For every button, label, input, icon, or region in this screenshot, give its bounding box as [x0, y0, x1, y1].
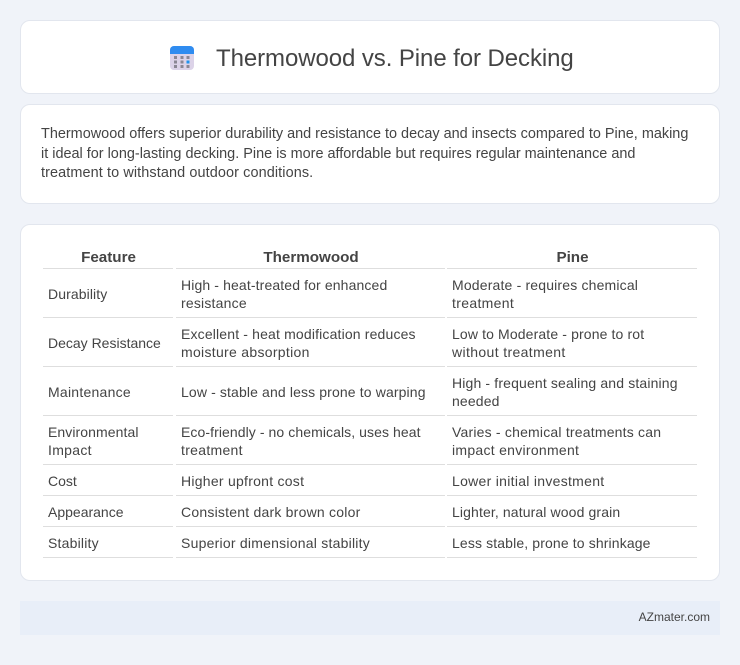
Stability Thermowood: Superior dimensional stability	[181, 535, 370, 551]
Environmental Thermowood	[181, 424, 421, 458]
row: Stability: Stability	[48, 535, 99, 551]
Durability Pine	[452, 277, 638, 311]
intro panel	[20, 104, 720, 204]
Environmental Thermowood: Eco-friendly - no chemicals, uses heat	[181, 424, 421, 440]
row: Cost: Cost	[48, 473, 77, 489]
row: Environmental Impact: Environmental	[48, 424, 139, 440]
panel: comparison table	[20, 224, 720, 581]
Durability Thermowood	[181, 277, 387, 311]
Stability Pine: Less stable, prone to shrinkage	[452, 535, 651, 551]
Durability Pine: Moderate - requires chemical	[452, 277, 638, 293]
row: Maintenance: Maintenance	[48, 384, 131, 400]
Decay Pine	[452, 326, 644, 360]
Maintenance Pine	[452, 375, 678, 409]
Environmental Pine: impact environment	[452, 442, 579, 458]
Durability Thermowood: resistance	[181, 295, 247, 311]
intro text: treatment to withstand outdoor conditions.	[41, 165, 313, 181]
icon: calendar	[170, 46, 194, 70]
Environmental Pine	[452, 424, 661, 458]
Decay Thermowood	[181, 326, 416, 360]
Cost Pine: Lower initial investment	[452, 473, 604, 489]
Appearance Thermowood: Consistent dark brown color	[181, 504, 360, 520]
header: Thermowood: Thermowood	[263, 249, 359, 266]
Maintenance Pine: needed	[452, 393, 500, 409]
Appearance Pine: Lighter, natural wood grain	[452, 504, 620, 520]
Decay Pine: without treatment	[452, 344, 566, 360]
Decay Thermowood: moisture absorption	[181, 344, 310, 360]
Cost Thermowood: Higher upfront cost	[181, 473, 304, 489]
Environmental Thermowood: treatment	[181, 442, 243, 458]
title: Thermowood vs. Pine for Decking	[216, 45, 574, 72]
row: Decay Resistance: Decay Resistance	[48, 335, 161, 351]
Maintenance Thermowood: Low - stable and less prone to warping	[181, 384, 426, 400]
Environmental Pine: Varies - chemical treatments can	[452, 424, 661, 440]
Durability Thermowood: High - heat-treated for enhanced	[181, 277, 387, 293]
footer source: AZmater.com	[639, 610, 710, 624]
Maintenance Pine: High - frequent sealing and staining	[452, 375, 678, 391]
Decay Thermowood: Excellent - heat modification reduces	[181, 326, 416, 342]
row: Environmental Impact	[48, 424, 139, 458]
footer bar	[20, 601, 720, 635]
Decay Pine: Low to Moderate - prone to rot	[452, 326, 644, 342]
intro text: it ideal for long-lasting decking. Pine is more affordable but requires regular maintenance and	[41, 146, 635, 162]
Durability Pine: treatment	[452, 295, 514, 311]
row: Appearance: Appearance	[48, 504, 124, 520]
row: Environmental Impact: Impact	[48, 442, 92, 458]
header: Pine: Pine	[556, 249, 589, 266]
row: Durability: Durability	[48, 286, 107, 302]
intro text	[41, 126, 688, 181]
title card	[20, 20, 720, 94]
header: Feature: Feature	[81, 249, 136, 266]
intro text: Thermowood offers superior durability and resistance to decay and insects compared to Pine, making	[41, 126, 688, 142]
